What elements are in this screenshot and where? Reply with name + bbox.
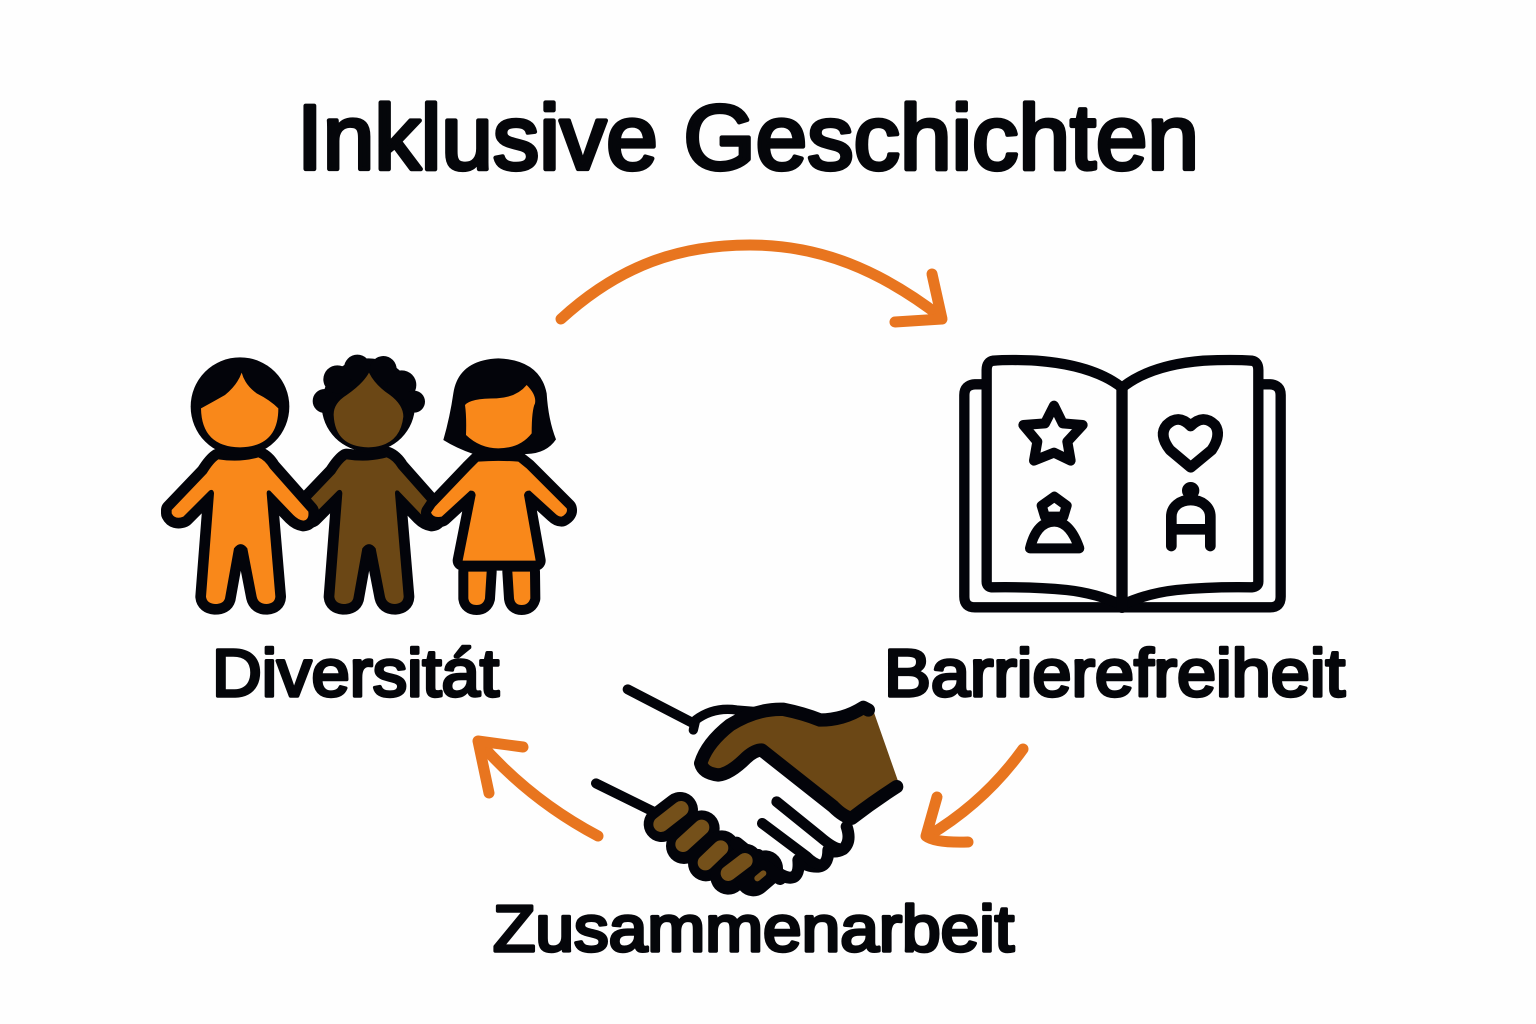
icon: open book with symbols [964, 360, 1281, 607]
brown fingers [661, 809, 780, 878]
person 2: brown figure [300, 355, 437, 604]
symbol: letter A [1171, 487, 1210, 546]
book spine [1105, 388, 1139, 607]
brown hand [701, 707, 900, 818]
book cover [964, 384, 1281, 607]
label: Diversität: Diversitát [212, 636, 499, 711]
upper cuff lines [596, 689, 757, 812]
left page [987, 360, 1122, 605]
label: Barrierefreiheit: Barrierefreiheit [884, 636, 1345, 711]
arrow: Barrierefreiheit to Zusammenarbeit [926, 749, 1023, 842]
icon: three diverse people holding hands [172, 355, 567, 605]
brown hand outline [701, 707, 897, 818]
label: Zusammenarbeit: Zusammenarbeit [493, 892, 1014, 965]
icon: handshake [596, 689, 900, 878]
arrow: Diversität to Barrierefreiheit [561, 245, 942, 322]
person 3: orange figure in dress [431, 358, 567, 605]
title: Inklusive Geschichten [297, 87, 1199, 189]
symbol: star [1023, 406, 1083, 461]
white hand outline and fingers [758, 802, 849, 878]
person 1: orange figure [172, 357, 308, 604]
symbol: heart [1163, 419, 1218, 467]
right page [1122, 360, 1258, 605]
symbol: small person [1030, 497, 1079, 548]
arrow: Zusammenarbeit to Diversität [478, 741, 598, 836]
